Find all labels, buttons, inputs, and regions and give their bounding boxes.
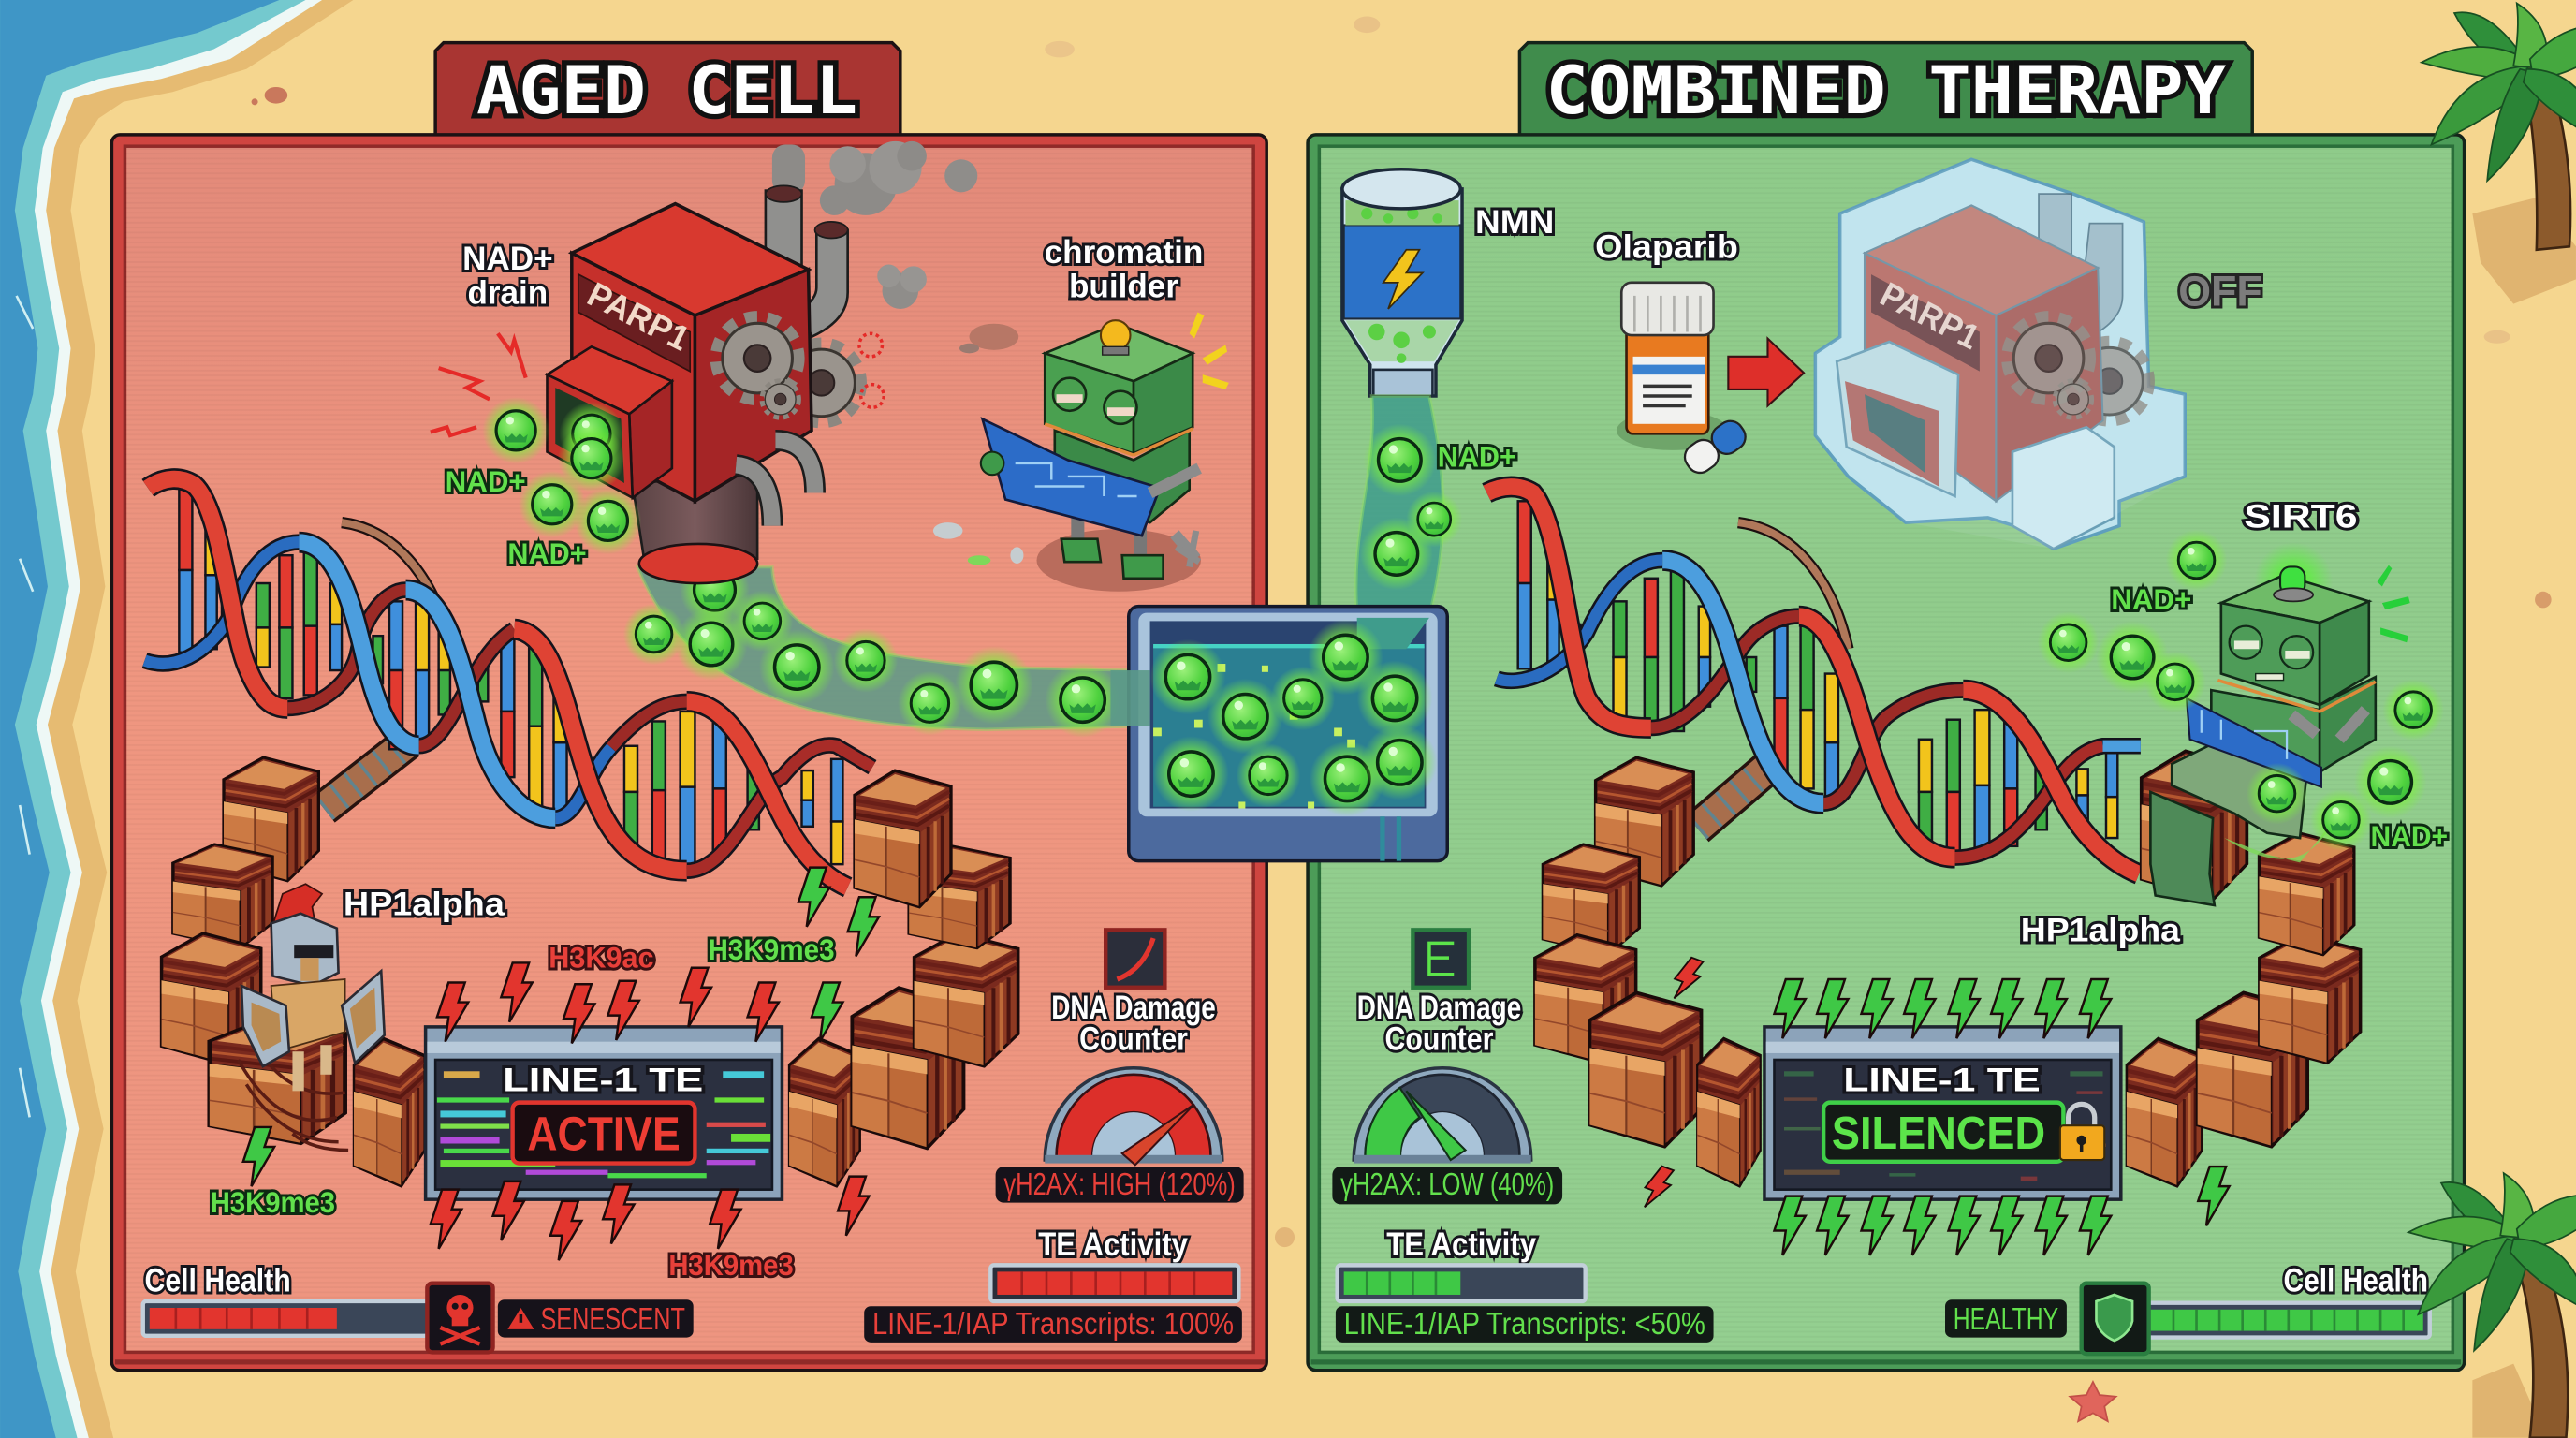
label: NAD+ near SIRT6: NAD+ (2111, 582, 2191, 616)
red and green bolts aged (243, 868, 879, 1260)
palm tree top right (2422, 4, 2576, 304)
label: TE Activity: TE Activity (1038, 1226, 1188, 1263)
panel frame (111, 135, 1266, 1371)
gauge: high (1045, 1068, 1222, 1165)
label: DNA Damage Counter: Counter (1385, 1020, 1494, 1057)
NAD+ orb under hopper (680, 555, 750, 624)
status: SENESCENT (498, 1299, 694, 1338)
ocean and shoreline (0, 0, 353, 1438)
status: SENESCENT: SENESCENT (540, 1302, 685, 1337)
label: NMN: NMN (1475, 204, 1554, 241)
bar: TE activity under 50% (1338, 1265, 1586, 1301)
gauge: low (1354, 1068, 1531, 1164)
chart: DNA helix aged (145, 479, 872, 888)
cell health aged (143, 1262, 694, 1352)
panel: aged cell (111, 43, 1266, 1371)
label: HP1alpha: HP1alpha (344, 887, 505, 923)
label: NAD+ bottle: NAD+ (1438, 439, 1516, 473)
bottle: NMN (1342, 169, 1462, 396)
icon: skull (427, 1284, 493, 1352)
tank: NAD+ pool (1110, 607, 1447, 861)
red cabinet (572, 204, 809, 315)
label: TE Activity: TE Activity (1386, 1226, 1536, 1263)
PARP1 plate: PARP1 (581, 275, 695, 359)
NAD+ orbs in tank (1150, 620, 1438, 816)
bar: cell health full (2144, 1303, 2430, 1338)
label: NAD+ upper: NAD+ (446, 464, 526, 498)
robot: HP1alpha knight (239, 884, 385, 1151)
NAD+ orbs around SIRT6 (2038, 530, 2444, 851)
label: H3K9me3 red: H3K9me3 (668, 1248, 794, 1282)
label: NAD+ lower: NAD+ (507, 536, 587, 570)
bar: TE activity 100% (990, 1265, 1238, 1301)
gears (716, 317, 798, 399)
pill bottle: Olaparib (1617, 283, 1750, 477)
label: Olaparib: Olaparib (1595, 229, 1738, 266)
green bolts therapy (1639, 955, 2230, 1255)
label: DNA Damage Counter: DNA Damage (1357, 990, 1521, 1026)
panel frame (1308, 135, 2465, 1371)
icon: intact DNA (1412, 930, 1469, 988)
label: SIRT6: SIRT6 (2244, 498, 2358, 535)
label: OFF: OFF (2178, 267, 2262, 315)
arrow: inhibits PARP1 (1728, 339, 1804, 405)
label: H3K9ac: H3K9ac (549, 941, 654, 975)
label: Cell Health: Cell Health (2284, 1262, 2428, 1299)
heading tab: aged cell: AGED CELL (476, 52, 857, 129)
readout: gamma H2AX: γH2AX: HIGH (120%) (1003, 1167, 1236, 1202)
status: SILENCED: SILENCED (1832, 1108, 2045, 1159)
label: chromatin builder: chromatin (1045, 234, 1203, 271)
PARP1 frozen plate: PARP1 (1874, 275, 1985, 357)
icon: damaged DNA (1105, 930, 1164, 988)
heading tab: aged cell (435, 43, 900, 138)
label: Cell Health: Cell Health (145, 1262, 291, 1299)
icon: shield (2082, 1284, 2149, 1354)
machine: PARP1 (547, 141, 977, 583)
label: H3K9me3 green right: H3K9me3 (708, 932, 835, 966)
nucleosome ring aged (162, 757, 1018, 1186)
label: NAD+ lower right: NAD+ (2371, 819, 2448, 853)
palm tree bottom right (2408, 1173, 2576, 1438)
machine: frozen PARP1 (1815, 159, 2185, 549)
NAD+ orbs aged (482, 397, 1120, 738)
capsule (1679, 416, 1750, 477)
readout: gamma H2AX: γH2AX: LOW (40%) (1340, 1167, 1554, 1202)
glitch data bars (437, 1071, 770, 1178)
panel: LINE-1 TE active (426, 1027, 782, 1199)
red sparks (431, 333, 884, 435)
label: chromatin builder: builder (1069, 269, 1178, 305)
label: H3K9me3 green left: H3K9me3 (211, 1185, 335, 1219)
DNA damage counter therapy (1332, 930, 1562, 1204)
heading: LINE-1 TE: LINE-1 TE (1843, 1062, 2041, 1098)
status: ACTIVE: ACTIVE (527, 1108, 681, 1161)
NAD+ orbs from bottle (1360, 424, 1462, 590)
intake (547, 346, 672, 414)
robot: chromatin builder (959, 312, 1229, 592)
icon: starfish (2070, 1382, 2116, 1421)
panel: LINE-1 TE silenced (1764, 1027, 2121, 1199)
NAD+ stream aged (637, 566, 1137, 729)
readout: transcripts: LINE-1/IAP Transcripts: 100% (872, 1307, 1234, 1342)
heading tab: combined therapy (1519, 43, 2252, 138)
DNA damage counter aged (996, 930, 1244, 1203)
TE activity therapy (1336, 1226, 1714, 1343)
hopper (633, 468, 757, 559)
label: DNA Damage Counter: Counter (1079, 1020, 1188, 1057)
label: NAD+ drain: drain (467, 275, 548, 312)
readout: transcripts: LINE-1/IAP Transcripts: <50% (1344, 1307, 1705, 1342)
status: HEALTHY: HEALTHY (1954, 1302, 2058, 1337)
label: NAD+ drain: NAD+ (462, 241, 553, 277)
beach pebbles and shells (252, 17, 2552, 1247)
panel: combined therapy (1110, 43, 2465, 1371)
dim data bars (1784, 1071, 2106, 1181)
chimneys and smoke (766, 141, 977, 337)
icon: padlock (2060, 1104, 2104, 1160)
TE activity aged (864, 1226, 1242, 1343)
NAD+ stream therapy (1356, 396, 1443, 616)
label: DNA Damage Counter: DNA Damage (1051, 990, 1216, 1026)
pipes (736, 465, 772, 526)
label: HP1alpha: HP1alpha (2021, 913, 2180, 949)
chart: DNA helix therapy (1486, 487, 2141, 874)
debris (933, 522, 1023, 565)
bar: cell health low (143, 1301, 432, 1336)
robot: SIRT6 (2150, 542, 2410, 905)
cell health therapy (1945, 1262, 2430, 1354)
nucleosome ring therapy (1535, 751, 2361, 1186)
heading tab: combined therapy: COMBINED THERAPY (1546, 52, 2226, 129)
heading: LINE-1 TE: LINE-1 TE (503, 1062, 703, 1098)
